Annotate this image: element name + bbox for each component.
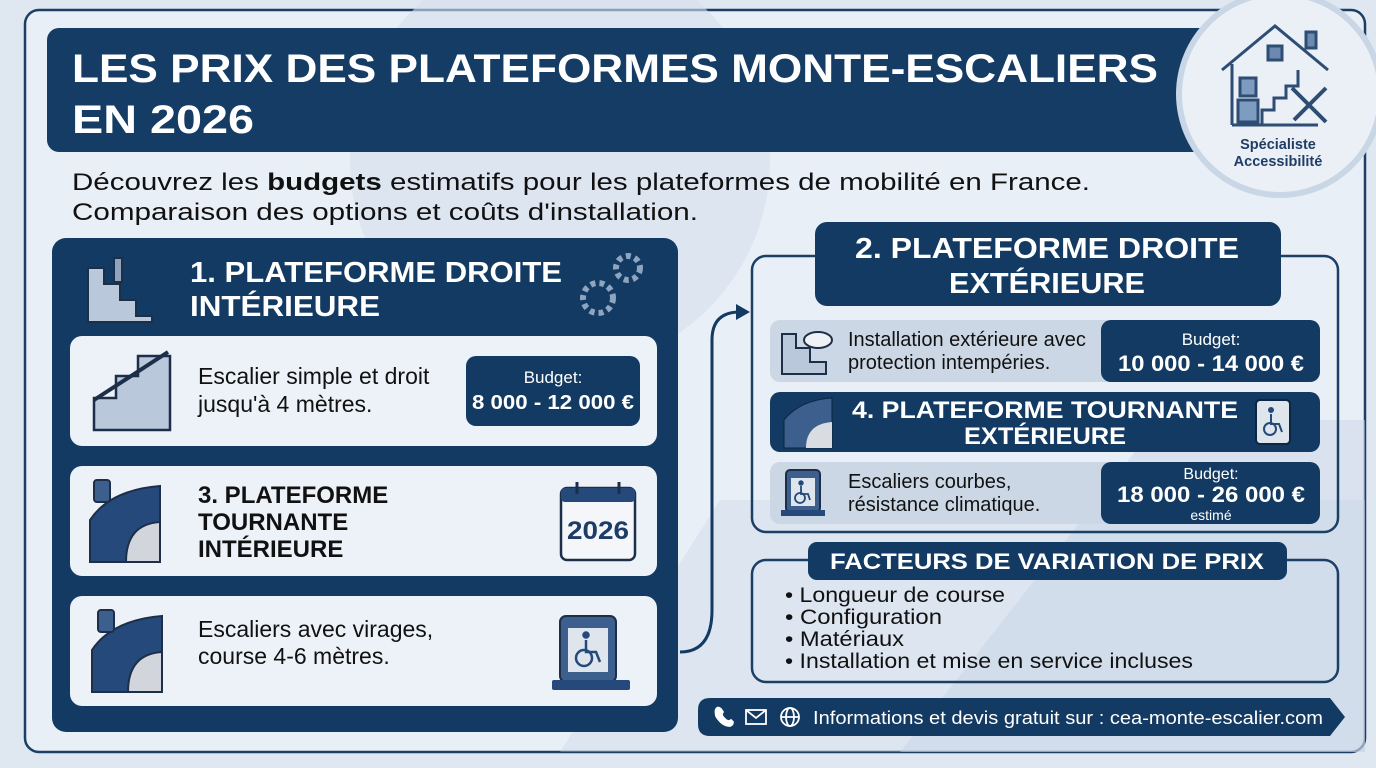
bullet list [785,584,1193,673]
icon: phone / mail / globe [716,708,799,726]
budget box 4 [1101,462,1320,524]
title banner: LES PRIX DES PLATEFORMES MONTE-ESCALIERS [72,47,1158,91]
icon: curved stairlift [92,610,162,692]
heading: 4. plateforme tournante exterieure: 4. PLATEFORME TOURNANTE [852,397,1238,424]
budget box 4: 18 000 - 26 000 € [1117,482,1305,507]
title banner: EN 2026 [72,98,254,142]
heading: 2. plateforme droite exterieure: EXTÉRIEURE [949,266,1145,300]
row: escaliers courbes: Escaliers courbes, [848,471,1011,493]
icon: wheelchair platform small [781,470,825,516]
icon: house with stairlift and tools [1222,26,1328,125]
budget box 4: Budget: [1183,466,1239,483]
bullet list: • Matériaux [785,628,905,651]
heading: facteurs: FACTEURS DE VARIATION DE PRIX [830,549,1264,574]
card: escaliers avec virages: Escaliers avec virages, [198,616,433,642]
card: 3. plateforme tournante interieure: INTÉRIEURE [198,535,343,563]
badge: specialiste accessibilite: Spécialiste [1240,137,1316,153]
row: installation exterieure [770,320,1320,382]
budget box 2: Budget: [1182,330,1240,349]
footer contact bar: Informations et devis gratuit sur : cea-monte-escalier.com [813,708,1323,728]
card: escalier simple: Escalier simple et droit [198,363,430,389]
budget box 2 [1101,320,1320,382]
panel: exterior platforms [752,222,1338,532]
row: installation exterieure: protection intempéries. [848,352,1050,374]
heading: 2. plateforme droite exterieure [815,222,1281,306]
card: escalier simple [70,336,657,446]
icon: calendar 2026: 2026 [567,517,629,545]
budget box 1: Budget: [524,368,582,387]
budget box 2: 10 000 - 14 000 € [1118,351,1304,376]
icon: curved stairs [90,480,160,562]
bullet list: • Longueur de course [785,584,1005,607]
icon: outdoor stairs with weather [782,332,832,374]
heading: facteurs [808,542,1287,580]
heading: 1. plateforme droite interieure [190,257,562,323]
heading: 4. plateforme tournante exterieure: EXTÉRIEURE [964,422,1126,450]
card: escalier simple: jusqu'à 4 mètres. [197,391,372,417]
row: installation exterieure: Installation extérieure avec [848,329,1086,351]
row: escaliers courbes: résistance climatique. [848,494,1040,516]
heading: 2. plateforme droite exterieure: 2. PLATEFORME DROITE [855,233,1239,265]
badge: specialiste accessibilite [1176,0,1376,198]
row: escaliers courbes [770,462,1320,524]
budget box 4: estimé [1190,507,1232,523]
badge: specialiste accessibilite: Accessibilité [1234,154,1322,170]
panel: interior platforms [52,238,678,732]
budget box 1 [466,356,640,426]
subtitle: Comparaison des options et coûts d'installation. [72,199,698,226]
heading: 1. plateforme droite interieure: INTÉRIEURE [190,289,380,323]
heading: 1. plateforme droite interieure: 1. PLATEFORME DROITE [190,257,562,289]
icon: wheelchair platform [552,616,630,690]
bullet list: • Configuration [785,606,942,629]
subtitle: Découvrez les budgets estimatifs pour les plateformes de mobilité en France. [72,169,1090,196]
icon: straight stairs [94,352,170,430]
budget box 1: 8 000 - 12 000 € [472,392,634,414]
icon: straight stairlift [88,258,152,322]
subtitle [72,169,1090,226]
icon: calendar 2026 [561,482,635,560]
arrow: connector to exterior [680,304,750,652]
icon: gears [583,256,640,313]
title banner [47,28,1237,152]
card: 3. plateforme tournante interieure: 3. PLATEFORME [198,482,388,509]
card: escaliers avec virages [70,596,657,706]
card: 3. plateforme tournante interieure [70,466,657,576]
heading: 4. plateforme tournante exterieure [770,392,1320,452]
card: escaliers avec virages: course 4-6 mètres. [198,643,390,669]
bullet list: • Installation et mise en service incluses [785,650,1193,673]
card: 3. plateforme tournante interieure: TOURNANTE [198,509,348,536]
footer contact bar [698,698,1345,736]
panel: facteurs de variation [752,542,1338,682]
